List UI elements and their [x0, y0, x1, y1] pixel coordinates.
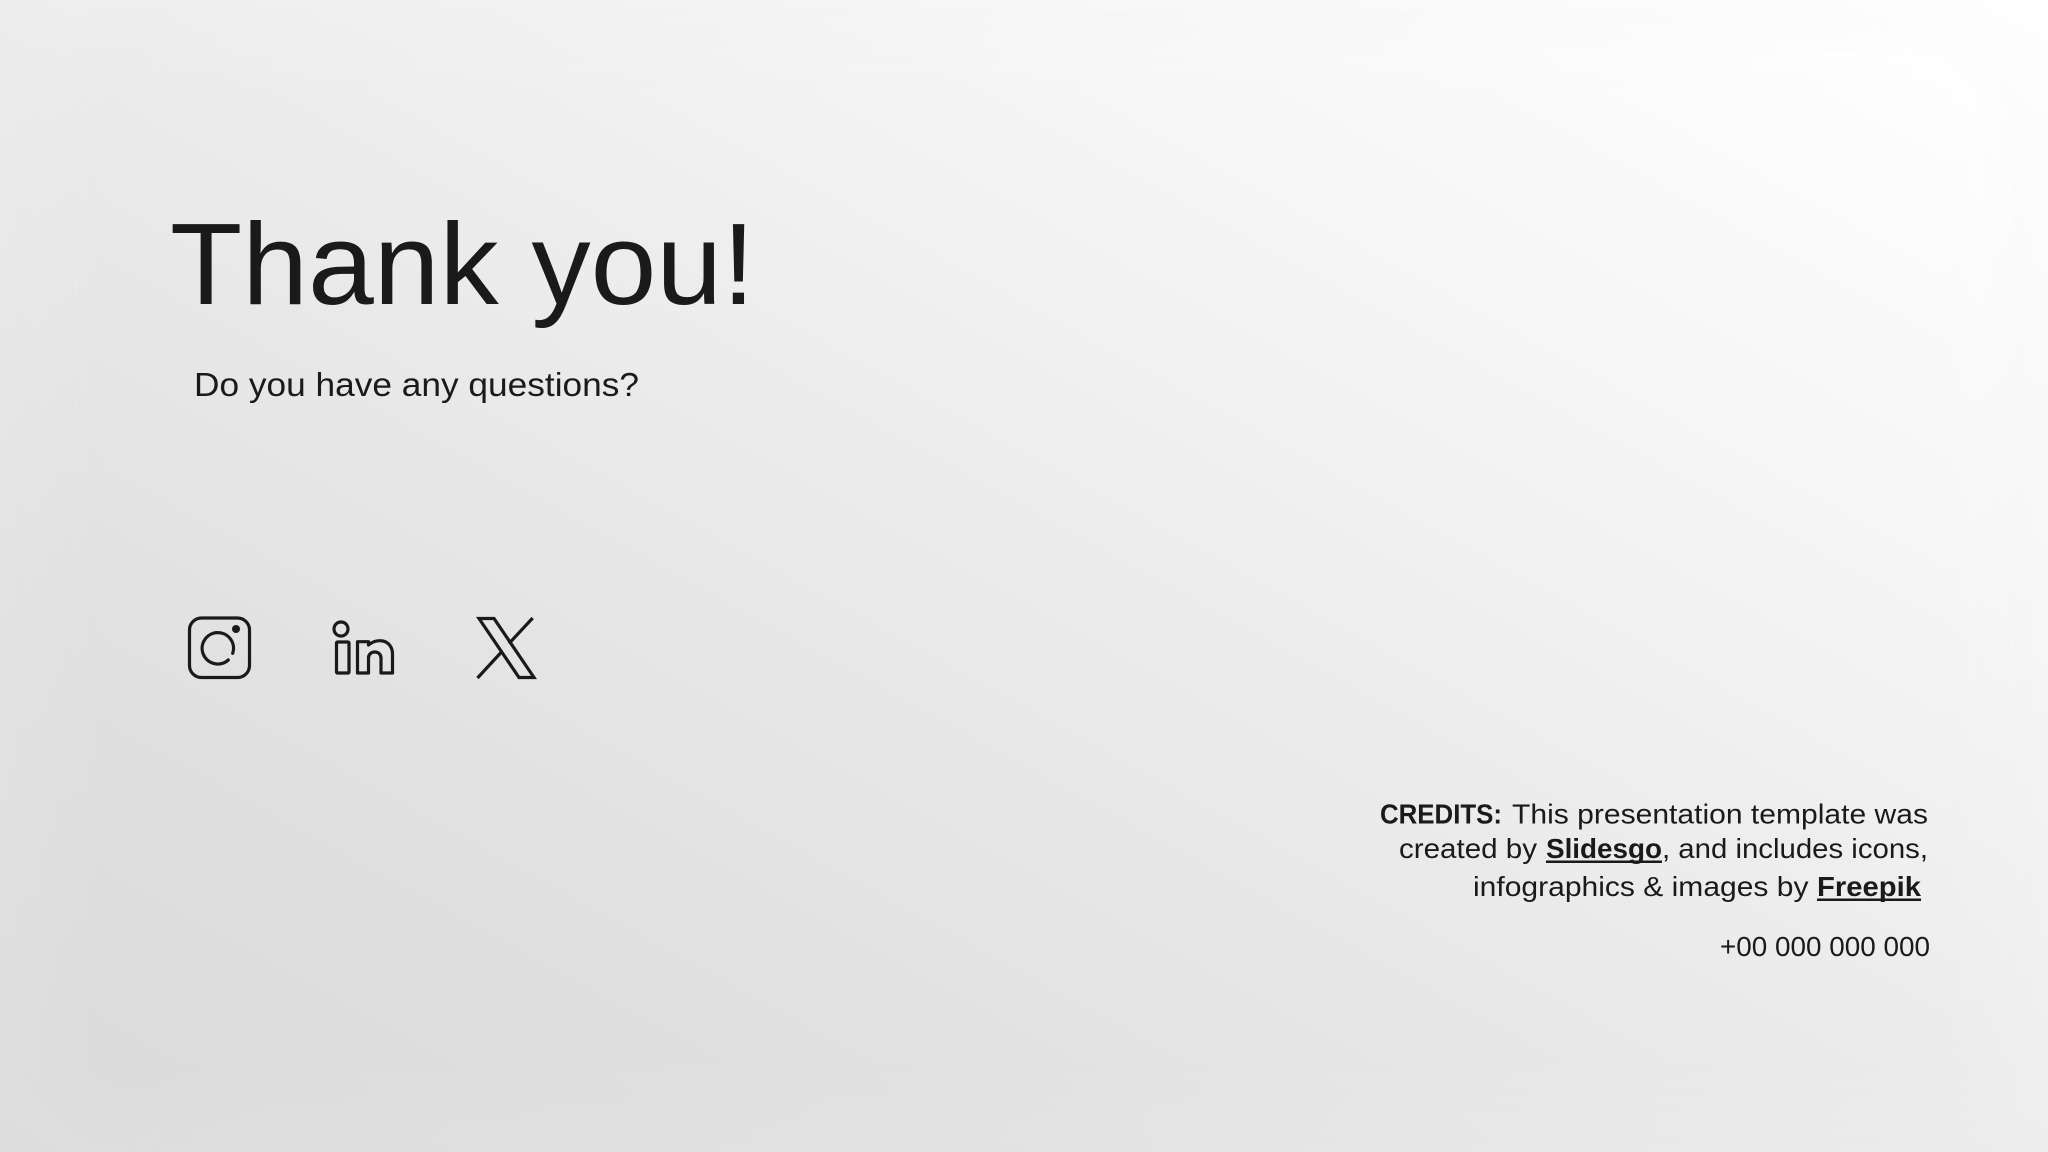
subtitle: Do you have any questions?	[194, 366, 639, 403]
credits text: Freepik	[1817, 871, 1921, 902]
credits text	[1380, 798, 1928, 902]
credits text: Slidesgo	[1546, 833, 1662, 864]
credits text: infographics & images by	[1473, 871, 1808, 902]
social icons	[190, 618, 534, 678]
credits text: created by	[1399, 833, 1537, 864]
credits text: CREDITS:	[1380, 798, 1502, 830]
title: Thank you!	[170, 199, 755, 329]
phone number: +00 000 000 000	[1720, 931, 1930, 962]
icon: x	[478, 618, 534, 678]
credits text: , and includes icons,	[1662, 833, 1928, 864]
credits text: This presentation template was	[1512, 798, 1928, 830]
icon: linkedin	[334, 622, 392, 673]
icon: instagram	[190, 618, 250, 678]
